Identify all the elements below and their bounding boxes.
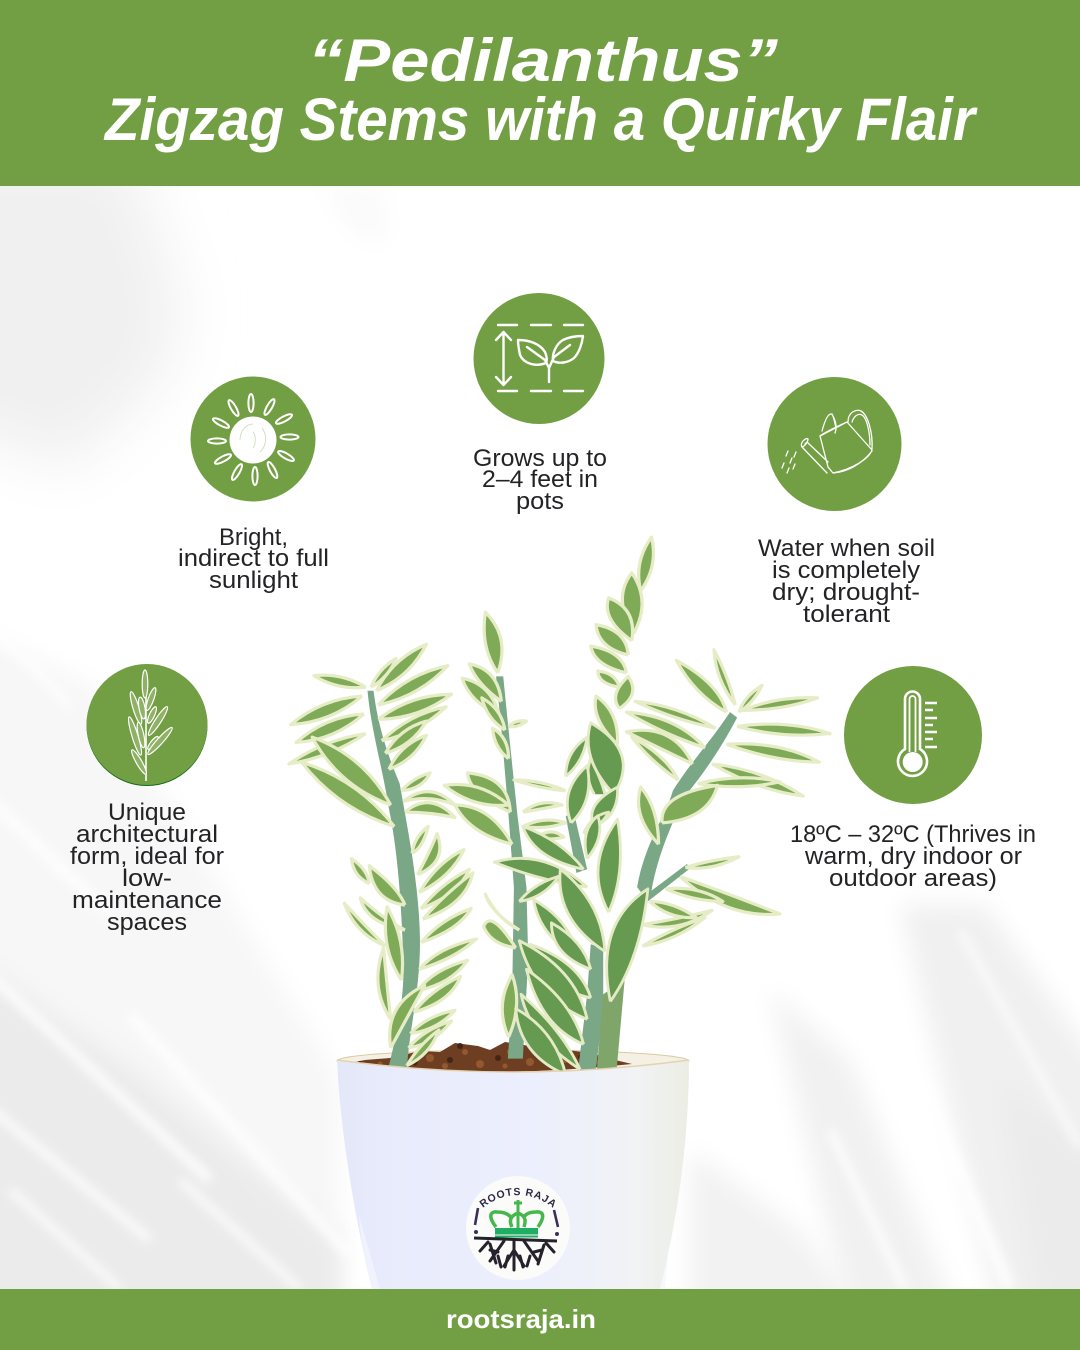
text: watering	[758, 535, 935, 628]
text: height: pots	[516, 488, 564, 515]
footer banner	[0, 1289, 1080, 1350]
text: temperature: outdoor areas)	[829, 865, 997, 892]
text: temperature	[790, 821, 1036, 892]
icon: watering can	[768, 377, 902, 511]
pot back rim and soil	[337, 1042, 689, 1072]
icon: herb sprig	[86, 664, 208, 786]
icon: thermometer	[844, 666, 982, 804]
text: height: 2–4 feet in	[482, 466, 598, 493]
plant: variegated pedilanthus	[289, 537, 830, 1080]
title	[103, 27, 978, 153]
text: height	[473, 445, 607, 515]
text: architectural form: form, ideal for	[70, 843, 224, 870]
text: watering: dry; drought-	[772, 579, 920, 606]
text: architectural form: low-	[122, 865, 172, 892]
text: temperature: warm, dry indoor or	[804, 843, 1022, 870]
leaves: left stem	[289, 644, 476, 1066]
leaves: top and right branches	[591, 537, 830, 946]
text: architectural form: Unique	[108, 799, 186, 826]
text: sunlight	[178, 524, 329, 594]
text: architectural form	[70, 799, 224, 936]
text: watering: Water when soil	[758, 535, 935, 562]
text: height: Grows up to	[473, 445, 607, 472]
logo badge: Roots Raja: ROOTS RAJA	[479, 1188, 555, 1208]
leaves: central cluster	[494, 723, 648, 1075]
text: watering: is completely	[772, 557, 920, 584]
text: architectural form: spaces	[107, 909, 187, 936]
text: watering: tolerant	[803, 601, 890, 628]
pot	[337, 1060, 689, 1289]
text: temperature: 18ºC – 32ºC (Thrives in	[790, 821, 1036, 848]
text: sunlight: sunlight	[209, 567, 298, 594]
text: architectural form: architectural	[76, 821, 218, 848]
footer website: rootsraja.in	[446, 1304, 596, 1334]
text: sunlight: indirect to full	[178, 545, 329, 572]
icon: sun	[190, 376, 316, 502]
header banner	[0, 0, 1080, 186]
logo badge: Roots Raja	[466, 1176, 570, 1280]
plant stems	[367, 676, 737, 1080]
title: “Pedilanthus”	[308, 27, 778, 94]
leaves: middle stem	[444, 612, 566, 1037]
text: architectural form: maintenance	[72, 887, 222, 914]
title: Zigzag Stems with a Quirky Flair	[103, 86, 978, 153]
text: sunlight: Bright,	[219, 524, 288, 551]
icon: plant height	[474, 293, 604, 424]
